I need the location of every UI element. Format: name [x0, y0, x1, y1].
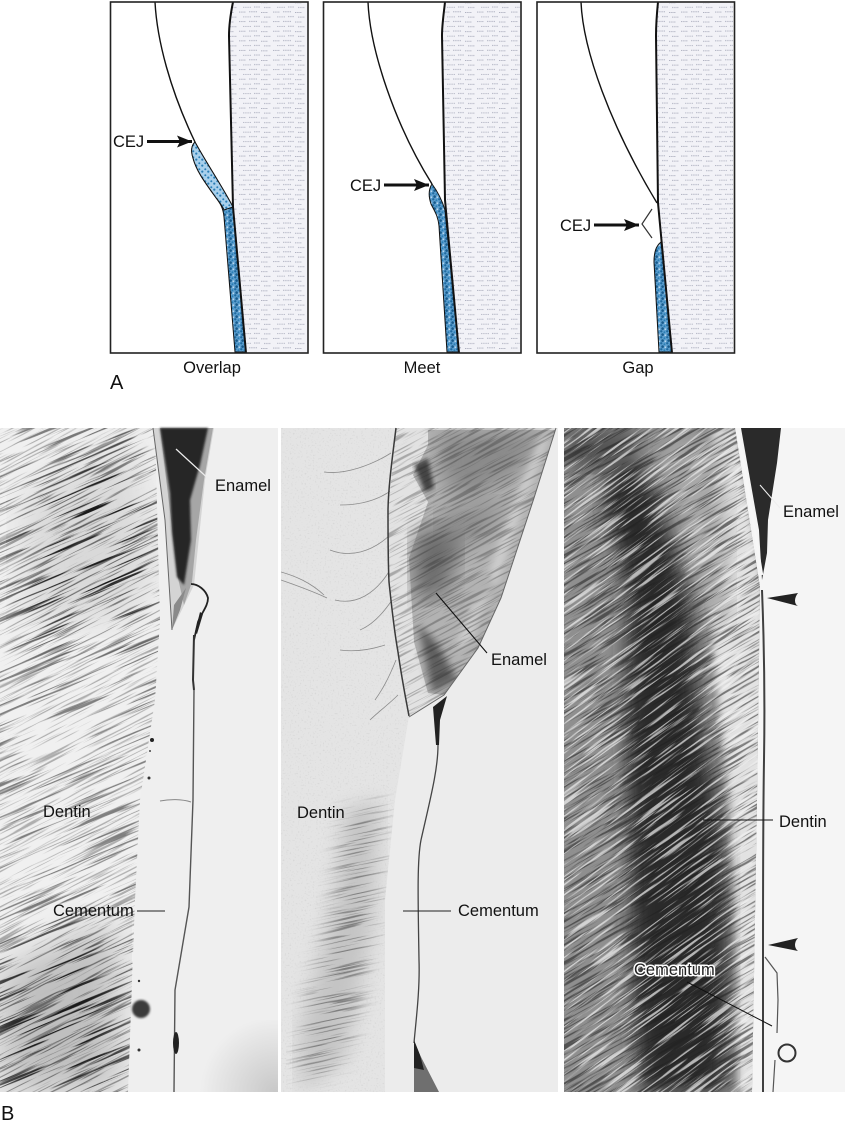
arrowhead lower — [768, 938, 798, 951]
dentinoenamel line — [229, 2, 246, 353]
grain — [281, 428, 411, 1092]
cementum layer — [429, 184, 459, 352]
cementum surface line — [193, 635, 194, 690]
darker tubule band — [300, 800, 380, 1092]
dentin tubules — [0, 428, 160, 1092]
diagram: overlap — [110, 2, 308, 377]
arrowhead upper — [767, 593, 798, 606]
enamel surface line — [581, 2, 657, 203]
dark specks — [132, 1000, 150, 1018]
dark band — [605, 450, 728, 1092]
photo background — [564, 428, 845, 1092]
frame — [537, 2, 734, 353]
white gap strip — [739, 436, 762, 575]
fine crack — [160, 800, 191, 802]
enamel label: Enamel — [215, 477, 271, 495]
dentin label: Dentin — [43, 803, 91, 821]
cementum layer — [192, 142, 246, 352]
CEJ label: CEJ — [350, 177, 381, 195]
dark sliver below enamel — [433, 696, 447, 745]
mid-grey upper right — [660, 440, 730, 620]
gap chevron — [642, 209, 652, 238]
cementum leader — [137, 910, 165, 912]
dentin hatching — [442, 3, 520, 352]
caption: overlap: Overlap — [183, 359, 241, 377]
panel A: schematic diagrams — [110, 2, 734, 394]
enamel cap — [741, 428, 781, 580]
pale zone near root surface — [706, 428, 760, 1092]
cementum label: Cementum — [458, 902, 539, 920]
dentin tubules — [564, 428, 769, 1092]
CEJ label: CEJ — [113, 133, 144, 151]
frame — [324, 2, 521, 353]
cementum overhang — [191, 584, 208, 640]
enamel outer edge — [409, 428, 556, 717]
dentin hatching — [229, 3, 307, 352]
caption: meet: Meet — [404, 359, 441, 377]
enamel leader — [436, 593, 487, 653]
frame — [110, 2, 308, 353]
dentin hatching — [656, 3, 733, 352]
enamel surface line — [155, 2, 195, 142]
dentinoenamel line — [656, 2, 672, 353]
dentin leader — [703, 819, 773, 821]
dentin tubules — [281, 428, 411, 1092]
enamel label: Enamel — [491, 651, 547, 669]
CEJ label: CEJ — [560, 217, 591, 235]
dark lens on surface — [173, 1032, 179, 1054]
tone clouds — [20, 440, 155, 620]
micrograph 2: meet — [281, 428, 560, 1092]
CEJ arrow — [384, 184, 429, 186]
dentinoenamel line — [442, 2, 459, 353]
enamel leader — [176, 449, 212, 482]
enamel surface line — [368, 2, 432, 184]
micrograph 1: overlap — [0, 428, 278, 1092]
panel letter B: B — [1, 1103, 14, 1125]
photo background — [0, 428, 278, 1092]
dark upper left corner — [564, 428, 640, 470]
root surface line — [762, 590, 764, 1092]
cementum light upper part — [192, 142, 233, 210]
cementum label: Cementum — [634, 961, 715, 979]
cementum leader — [403, 910, 451, 912]
enamel leader — [760, 485, 780, 508]
enamel cap — [153, 428, 214, 630]
CEJ arrow — [594, 224, 639, 226]
streak overlays — [564, 428, 769, 1092]
diagram: meet — [324, 2, 521, 377]
fine arc tubules — [281, 453, 398, 720]
panel letter A: A — [110, 372, 124, 394]
cementum loop — [778, 1044, 796, 1062]
micrograph 3: gap — [564, 428, 845, 1092]
dentin label: Dentin — [297, 804, 345, 822]
enamel shading — [385, 428, 560, 720]
enamel label: Enamel — [783, 503, 839, 521]
panel B: micrographs — [0, 428, 845, 1125]
photo background — [281, 428, 558, 1092]
diagram: gap — [537, 2, 734, 377]
cementum layer — [654, 242, 672, 352]
dentin-enamel line — [388, 428, 409, 716]
enamel wedge — [388, 428, 556, 717]
dentin label: Dentin — [779, 813, 827, 831]
cementum label: Cementum — [53, 902, 134, 920]
enamel tip — [172, 588, 186, 630]
junction outline — [153, 428, 172, 630]
bottom root deposit — [414, 1040, 439, 1092]
cementum surface detail — [765, 957, 778, 1092]
lower corner shading — [200, 1020, 278, 1092]
CEJ arrow — [147, 140, 192, 143]
cementum outer line — [414, 745, 438, 1043]
caption: gap: Gap — [622, 359, 654, 377]
cementum leader — [687, 982, 772, 1026]
